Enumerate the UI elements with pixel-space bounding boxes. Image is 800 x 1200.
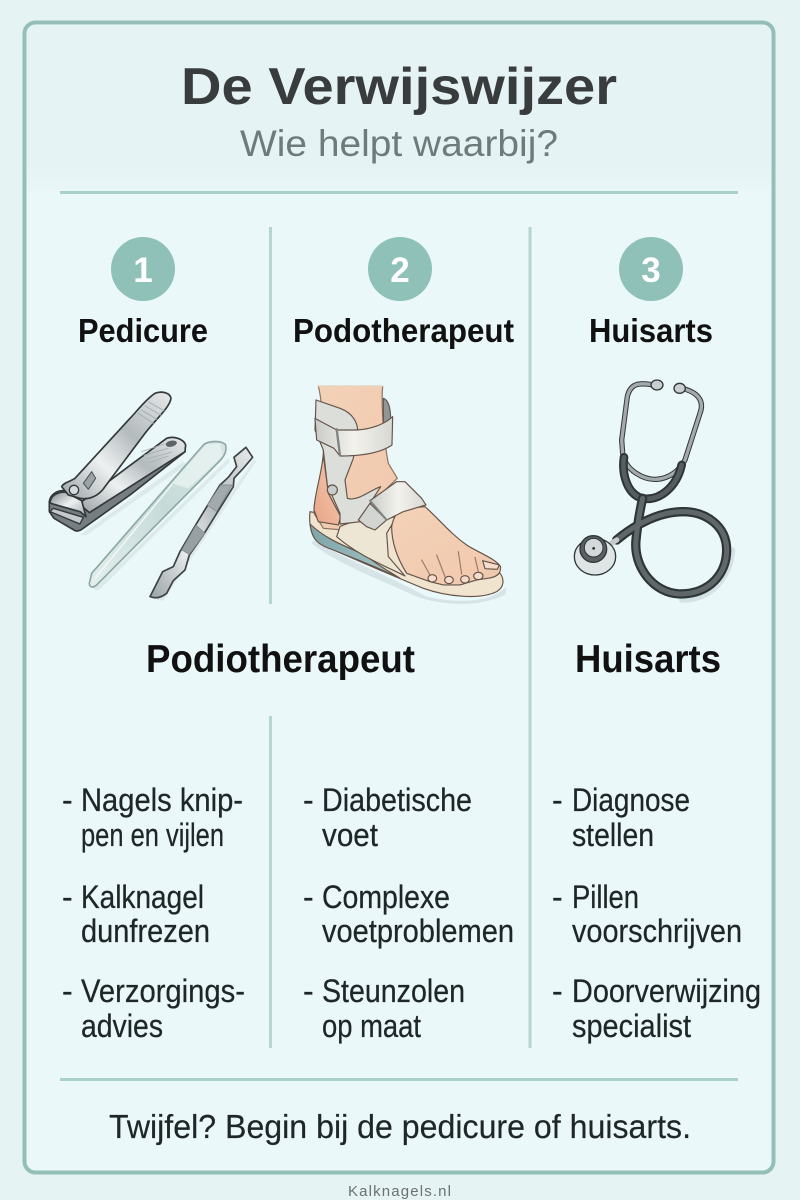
list: pedicure tasks: - xyxy=(62,879,73,915)
subheading: Huisarts: Huisarts xyxy=(575,638,721,681)
source credit: Kalknagels.nl xyxy=(348,1183,451,1200)
rear cuff xyxy=(383,398,391,423)
list: pedicure tasks xyxy=(62,782,245,1044)
number badge 3: 3 xyxy=(641,251,661,290)
list: podotherapeut tasks: - xyxy=(303,973,314,1009)
upper lever xyxy=(62,392,171,499)
jaws xyxy=(50,492,86,517)
list: pedicure tasks: Nagels knip- xyxy=(81,782,243,818)
chest piece xyxy=(607,540,617,546)
footer advice: Twijfel? Begin bij de pedicure of huisarts. xyxy=(109,1108,691,1145)
list: huisarts tasks: - xyxy=(552,879,563,915)
heading: Podotherapeut: Podotherapeut xyxy=(293,312,514,349)
shadow xyxy=(682,550,733,600)
number badge 1: 1 xyxy=(133,251,153,290)
list: huisarts tasks: Diagnose xyxy=(572,782,690,818)
list: pedicure tasks: advies xyxy=(81,1008,163,1044)
list: huisarts tasks: voorschrijven xyxy=(572,913,742,949)
icon: ankle brace and insole on a foot xyxy=(310,386,507,604)
list: huisarts tasks: stellen xyxy=(572,817,654,853)
list: pedicure tasks: pen en vijlen xyxy=(81,817,224,853)
list: huisarts tasks: - xyxy=(552,782,563,818)
main tube xyxy=(617,498,727,594)
list: podotherapeut tasks: Complexe xyxy=(322,879,450,915)
list: huisarts tasks: Doorverwijzing xyxy=(572,973,761,1009)
sole xyxy=(310,512,503,596)
cuticle tool xyxy=(150,447,253,598)
leg xyxy=(314,386,397,530)
number badge 3 xyxy=(619,237,683,301)
list: pedicure tasks: dunfrezen xyxy=(81,913,210,949)
list: podotherapeut tasks: voetproblemen xyxy=(322,913,514,949)
insole bed xyxy=(337,517,405,576)
list: podotherapeut tasks: Steunzolen xyxy=(322,973,465,1009)
number badge 1 xyxy=(111,237,175,301)
icon: nail clipper, glass file and cuticle tool xyxy=(49,392,257,601)
ankle strap xyxy=(315,417,393,456)
list: huisarts tasks xyxy=(552,782,761,1044)
list: pedicure tasks: - xyxy=(62,782,73,818)
brace upright xyxy=(315,400,381,524)
list: podotherapeut tasks: - xyxy=(303,879,314,915)
list: huisarts tasks: Pillen xyxy=(572,879,639,915)
heading: Pedicure: Pedicure xyxy=(78,312,208,349)
list: podotherapeut tasks: - xyxy=(303,782,314,818)
list: podotherapeut tasks xyxy=(303,782,514,1044)
icon: stethoscope xyxy=(574,380,733,600)
list: huisarts tasks: - xyxy=(552,973,563,1009)
header xyxy=(181,58,617,164)
glass file xyxy=(89,441,226,587)
shadow xyxy=(312,540,507,604)
forefoot strap xyxy=(370,482,426,520)
clipper underside xyxy=(49,452,185,531)
ear tubes xyxy=(622,384,701,479)
binaural tube xyxy=(623,457,682,499)
list: pedicure tasks: Kalknagel xyxy=(81,879,204,915)
list: podotherapeut tasks: voet xyxy=(322,817,378,853)
soft shadows xyxy=(80,458,257,601)
lower lever xyxy=(82,437,186,513)
list: podotherapeut tasks: op maat xyxy=(322,1008,421,1044)
list: pedicure tasks: - xyxy=(62,973,73,1009)
heading: Huisarts: Huisarts xyxy=(589,312,713,349)
title: De Verwijswijzer xyxy=(181,58,617,116)
number badge 2 xyxy=(368,237,432,301)
subheading: Podiotherapeut: Podiotherapeut xyxy=(146,638,415,681)
list: huisarts tasks: specialist xyxy=(572,1008,691,1044)
subtitle: Wie helpt waarbij? xyxy=(240,123,558,164)
list: podotherapeut tasks: Diabetische xyxy=(322,782,472,818)
list: pedicure tasks: Verzorgings- xyxy=(81,973,245,1009)
number badge 2: 2 xyxy=(390,251,410,290)
foot xyxy=(392,507,501,585)
